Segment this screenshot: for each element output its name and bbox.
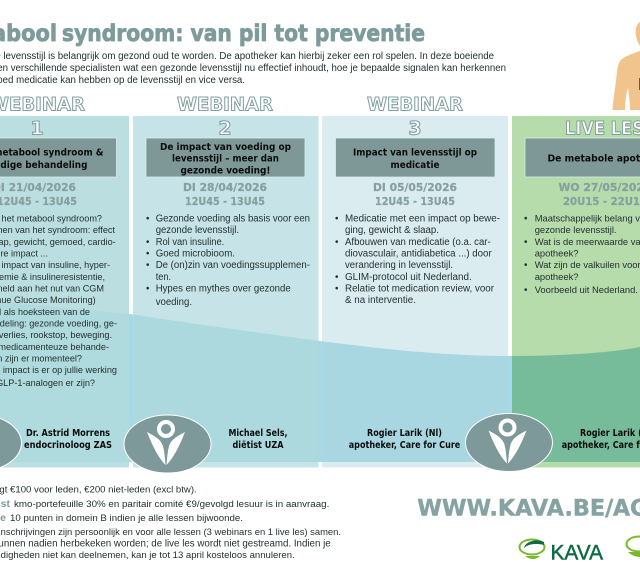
bullet list: • bbox=[524, 285, 528, 296]
speaker: Dr. Astrid Morrens bbox=[26, 428, 110, 439]
date and time bbox=[373, 181, 457, 208]
panel: webinar 2 bbox=[133, 116, 318, 468]
bullet list: ten. bbox=[156, 272, 171, 283]
panel: webinar 1 bbox=[0, 116, 129, 468]
practical information: kmo-portefeuille 30% en paritair comité €9/gevolgd lesuur is in aanvraag. bbox=[14, 499, 329, 510]
session title: Impact van levensstijl op bbox=[353, 148, 477, 158]
session title bbox=[146, 138, 305, 177]
date and time: DI 28/04/2026 bbox=[183, 181, 267, 194]
bullet list: apotheek? bbox=[535, 271, 578, 282]
bullet list: Hypes en mythes over gezonde bbox=[156, 284, 291, 294]
date and time: DI 05/05/2026 bbox=[373, 181, 457, 194]
session title: levensstijl – meer dan bbox=[172, 154, 279, 164]
bullet list: • bbox=[335, 272, 339, 283]
panel: webinar 3 bbox=[322, 116, 508, 468]
practical information bbox=[0, 484, 341, 561]
date and time bbox=[558, 181, 640, 208]
bullet list bbox=[524, 212, 640, 296]
bullet list: verandering in levensstijl. bbox=[345, 260, 453, 271]
session title bbox=[336, 138, 495, 177]
bullet list: & na interventie. bbox=[345, 295, 416, 306]
number 1: 1 bbox=[30, 118, 44, 140]
bullet list: De (on)zin van voedingssupplemen- bbox=[156, 260, 310, 271]
bullet list: gezonde levensstijl. bbox=[156, 225, 239, 236]
bullet list: • bbox=[335, 237, 339, 248]
practical information: 10 punten in domein B indien je alle lessen bijwoonde. bbox=[10, 513, 243, 524]
heading: webinar 2: WEBINAR bbox=[177, 94, 273, 116]
bullet list: • bbox=[146, 260, 150, 271]
speaker: Michael Sels, bbox=[228, 428, 288, 439]
bullet list bbox=[0, 214, 117, 388]
logo: KAVA: KAVA bbox=[550, 542, 603, 564]
session title bbox=[525, 138, 640, 177]
bullet list: • bbox=[335, 214, 339, 224]
icon: speaker medallion 2 bbox=[124, 415, 211, 473]
number 3: 3 bbox=[408, 118, 422, 140]
bullet list: gezonde levensstijl. bbox=[535, 224, 617, 235]
speaker bbox=[24, 428, 112, 451]
date and time bbox=[183, 181, 267, 208]
speaker: Rogier Larik (Nl) bbox=[367, 428, 442, 439]
speaker bbox=[349, 428, 461, 451]
bullet list: • bbox=[146, 237, 150, 248]
bullet list: Voorbeeld uit Nederland. bbox=[535, 284, 638, 295]
session title: De impact van voeding op bbox=[160, 142, 291, 153]
bullet list: • bbox=[146, 214, 150, 224]
bullet list: Relatie tot medication review, voor bbox=[345, 284, 495, 294]
bullet list: Rol van insuline. bbox=[156, 237, 224, 248]
illustration: human torso bbox=[612, 22, 640, 110]
bullet list: • bbox=[146, 284, 150, 294]
speaker: endocrinoloog ZAS bbox=[24, 440, 112, 451]
speaker: diëtist UZA bbox=[232, 440, 284, 451]
icon: speaker medallion 1 bbox=[0, 414, 22, 472]
session title bbox=[0, 138, 116, 177]
bullet list: Afbouwen van medicatie (o.a. car- bbox=[345, 237, 491, 248]
logo: KAVA bbox=[520, 540, 603, 564]
bullet list: • bbox=[146, 248, 150, 260]
date and time: 12U45 - 13U45 bbox=[185, 195, 265, 208]
number 2: 2 bbox=[218, 118, 232, 140]
date and time bbox=[0, 181, 77, 208]
icon: speaker medallion 3 bbox=[466, 414, 552, 472]
logo: partner swirl bbox=[626, 536, 640, 557]
bullet list: • bbox=[335, 284, 339, 294]
speaker: apotheker, Care for Cure bbox=[349, 440, 461, 451]
bullet list: Goed microbioom. bbox=[156, 248, 235, 260]
speaker bbox=[562, 428, 640, 451]
bullet list: Medicatie met een impact op bewe- bbox=[345, 214, 500, 224]
bullet list: • bbox=[524, 237, 528, 248]
band gaps between panels bbox=[129, 300, 512, 462]
speaker bbox=[228, 428, 288, 451]
bullet list: GLIM-protocol uit Nederland. bbox=[345, 272, 472, 283]
bullet list: apotheek? bbox=[535, 248, 578, 258]
bullet list: ging, gewicht & slaap. bbox=[345, 225, 439, 236]
title: syndroom: van pil tot preventie bbox=[62, 21, 425, 47]
intro text bbox=[0, 51, 506, 86]
date and time: 12U45 - 13U45 bbox=[375, 195, 455, 208]
website address: WWW.KAVA.BE/ bbox=[417, 496, 614, 522]
bullet list bbox=[146, 214, 310, 308]
bullet list: voeding. bbox=[156, 297, 192, 308]
bullet list: • bbox=[524, 214, 528, 224]
session title: medicatie bbox=[390, 160, 440, 171]
bullet list: • bbox=[524, 260, 528, 271]
session title: gezonde voeding! bbox=[180, 166, 270, 176]
bullet list: Gezonde voeding als basis voor een bbox=[156, 214, 310, 224]
heading: webinar 3: WEBINAR bbox=[367, 94, 463, 116]
bullet list bbox=[335, 214, 500, 306]
panel: live les bbox=[512, 116, 640, 468]
bullet list: diovasculair, antidiabetica ...) door bbox=[345, 248, 492, 260]
